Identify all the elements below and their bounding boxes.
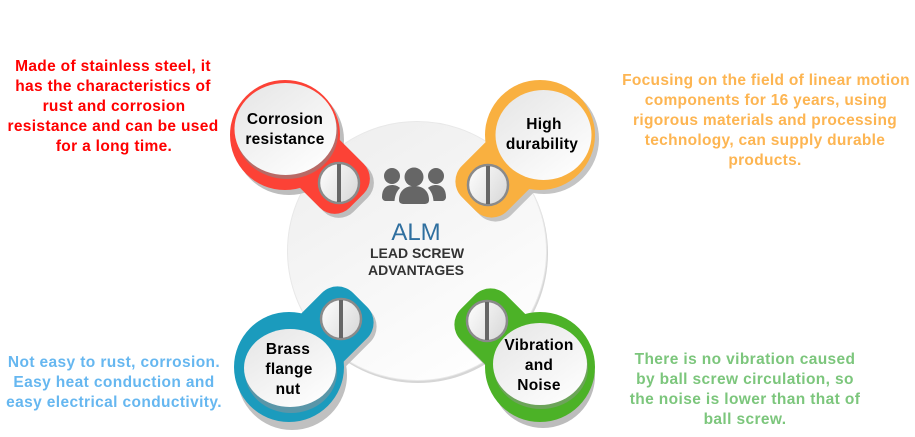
central circle (288, 122, 548, 383)
badge: vibration and noise (445, 279, 595, 428)
text: durability description: rigorous materials and processing (633, 112, 897, 129)
text: vibration description: by ball screw circulation, so (636, 371, 854, 388)
badge: corrosion resistance: resistance (245, 131, 325, 148)
text: corrosion description: rust and corrosion (43, 98, 185, 115)
text: brass nut description: Easy heat conduction and (13, 374, 215, 391)
badge: brass flange nut: Brass (266, 341, 310, 358)
text: vibration description: There is no vibration caused (635, 351, 855, 368)
text: corrosion description: resistance and can be used (7, 118, 219, 135)
text: corrosion description: Made of stainless steel, it (15, 58, 211, 75)
text: vibration description (630, 351, 861, 428)
central heading: ADVANTAGES (368, 262, 464, 278)
text: corrosion description: for a long time. (56, 138, 172, 155)
text: durability description: components for 16 years, using (645, 92, 887, 109)
icon: group of people (382, 168, 446, 204)
central heading (368, 219, 465, 278)
text: brass nut description: Not easy to rust, corrosion. (8, 354, 220, 371)
text: corrosion description (7, 58, 219, 155)
badge: high durability: High (526, 116, 562, 133)
text: vibration description: the noise is lower than that of (630, 391, 861, 408)
badge: high durability: durability (506, 136, 578, 153)
central heading: ALM (391, 219, 441, 246)
badge: vibration and noise: Vibration (504, 337, 574, 354)
badge: high durability (446, 80, 599, 231)
text: brass nut description: easy electrical conductivity. (6, 394, 222, 411)
badge: brass flange nut: flange (265, 361, 313, 378)
text: durability description: technology, can supply durable (645, 132, 885, 149)
badge: corrosion resistance (230, 80, 383, 227)
badge: corrosion resistance: Corrosion (247, 111, 323, 128)
text: durability description (622, 72, 910, 169)
text: durability description: Focusing on the field of linear motion (622, 72, 910, 89)
central heading: LEAD SCREW (370, 245, 465, 261)
badge: vibration and noise: and (525, 357, 553, 374)
badge: brass flange nut: nut (276, 381, 300, 398)
text: brass nut description (6, 354, 222, 411)
badge: vibration and noise: Noise (517, 377, 561, 394)
text: durability description: products. (728, 152, 802, 169)
text: vibration description: ball screw. (704, 411, 786, 428)
text: corrosion description: has the characteristics of (15, 78, 211, 95)
badge: brass flange nut (234, 277, 386, 430)
